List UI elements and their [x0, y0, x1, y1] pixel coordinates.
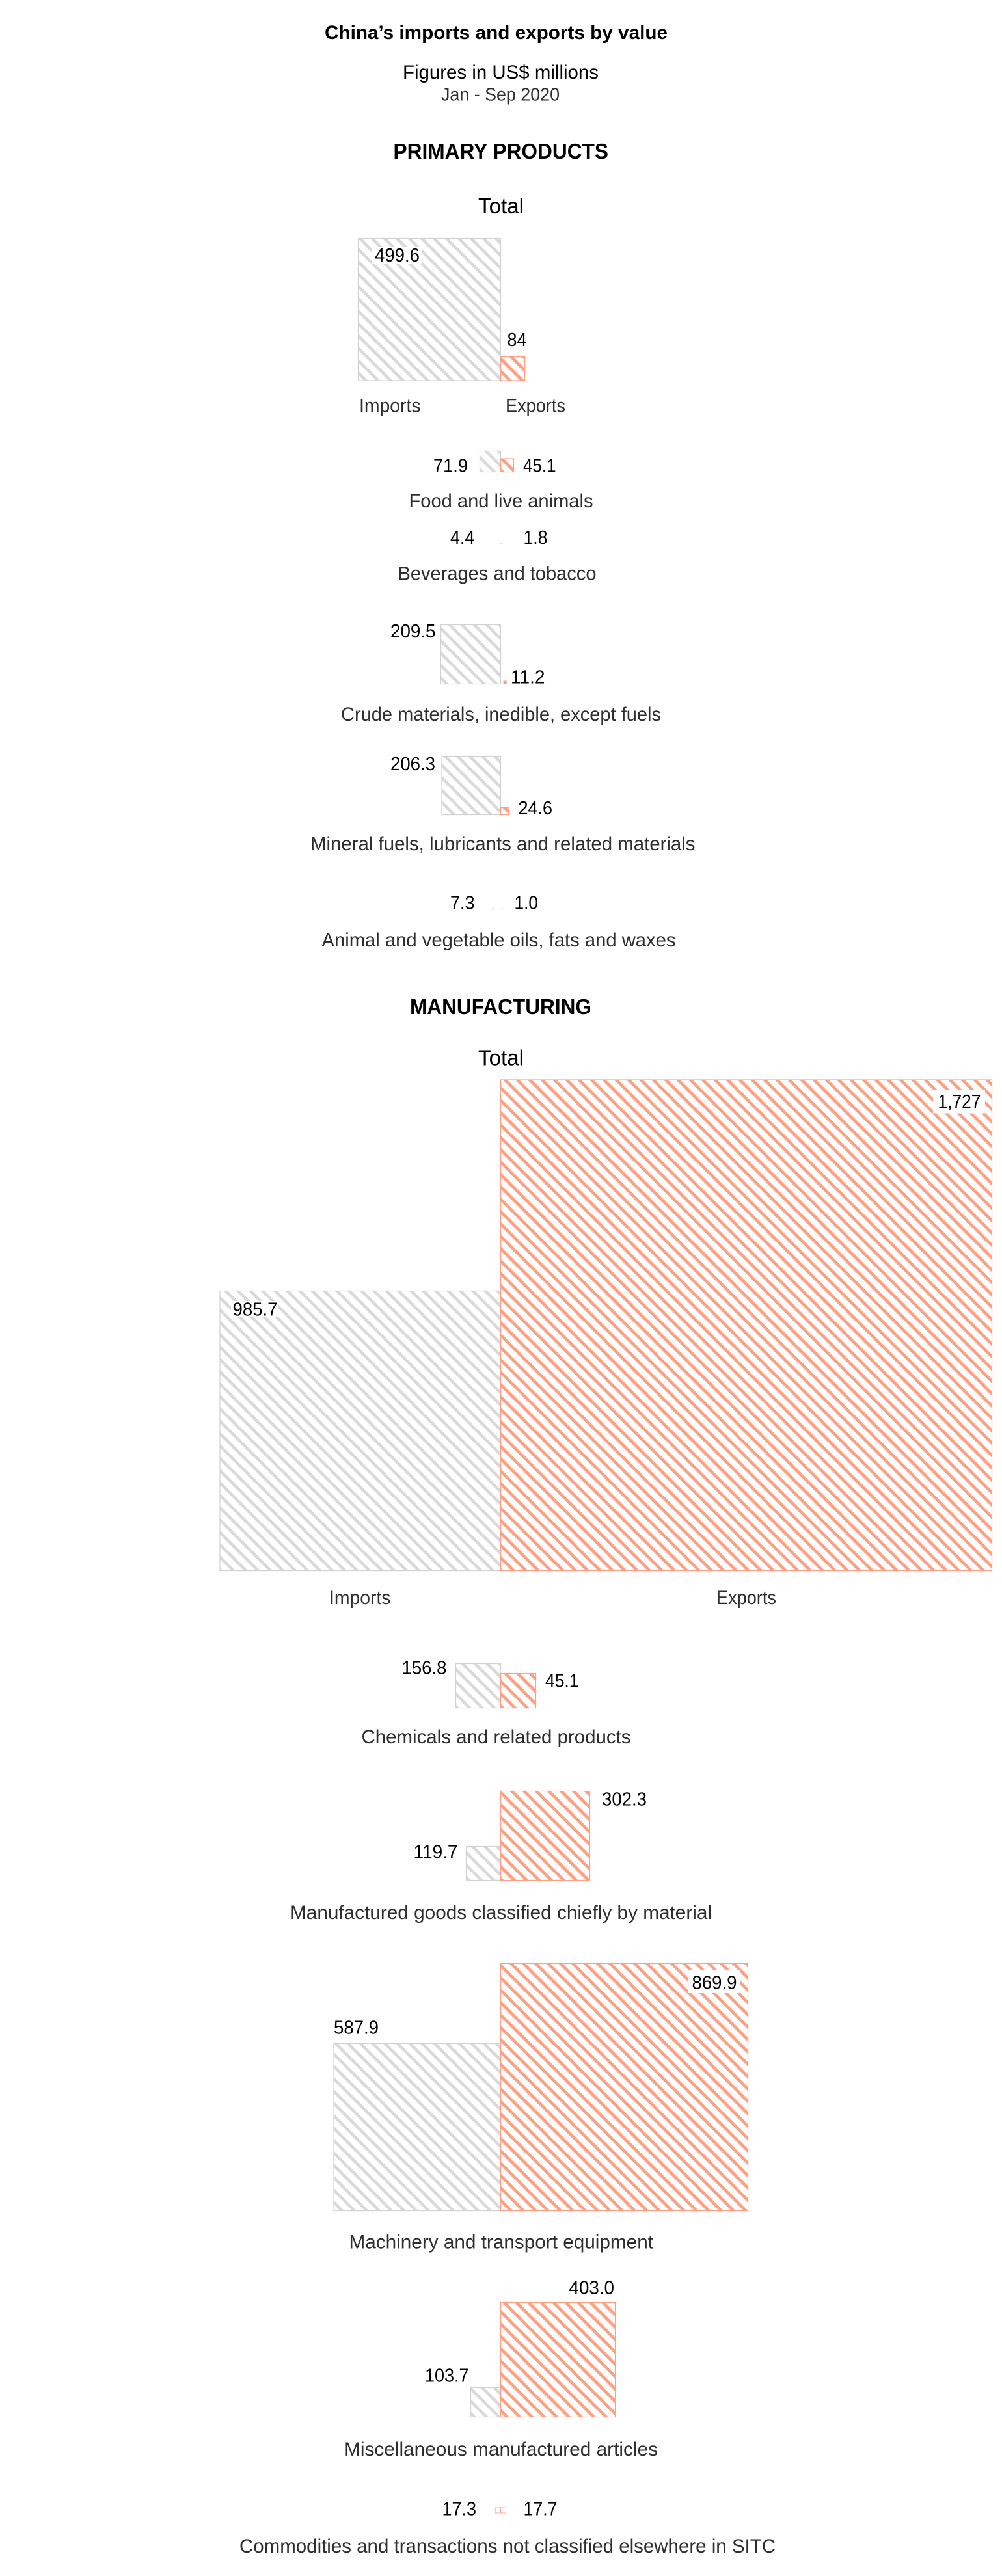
- value: exports: 11.2: [511, 667, 545, 688]
- heading: primary total: Total: [478, 194, 524, 218]
- value: imports: 71.9: [433, 455, 468, 476]
- category label: Manufactured goods classified chiefly by material: [290, 1902, 712, 1924]
- value: exports: 45.1: [523, 455, 556, 476]
- category label: Chemicals and related products: [362, 1726, 631, 1748]
- value: imports: 7.3: [450, 892, 475, 913]
- chart: animal and vegetable oils: [321, 892, 675, 951]
- chart: commodities not classified: [239, 2499, 776, 2557]
- heading: manufacturing total: Total: [478, 1046, 524, 1069]
- value box: exports: [688, 1970, 740, 1993]
- bar: imports 156.8: [455, 1664, 501, 1708]
- bar: imports 17.3: [496, 2508, 501, 2513]
- bar: exports 302.3: [501, 1791, 589, 1880]
- value: imports: 119.7: [414, 1842, 458, 1863]
- value: exports: 403.0: [569, 2278, 614, 2299]
- value: exports: 45.1: [545, 1670, 579, 1691]
- category label: Animal and vegetable oils, fats and waxes: [321, 930, 675, 951]
- bar: exports 24.6: [501, 808, 509, 814]
- label: exports: Exports: [506, 396, 565, 416]
- bar: imports 103.7: [471, 2387, 501, 2417]
- category label: Machinery and transport equipment: [349, 2231, 654, 2253]
- chart: miscellaneous articles: [344, 2278, 658, 2460]
- label: imports: Imports: [359, 396, 420, 416]
- value: imports: 587.9: [334, 2018, 379, 2039]
- value: exports: 24.6: [518, 798, 552, 819]
- value: exports: 302.3: [602, 1789, 647, 1810]
- chart: beverages and tobacco: [398, 528, 596, 584]
- bar: exports 403.0: [501, 2303, 616, 2417]
- chart: machinery and transport: [334, 1963, 748, 2253]
- bar: imports 4.4: [500, 543, 501, 544]
- value: imports: 4.4: [450, 528, 475, 548]
- value: exports: 1,727: [938, 1092, 981, 1112]
- subtitle: period: Jan - Sep 2020: [441, 85, 560, 104]
- bar: imports 206.3: [442, 756, 501, 814]
- chart: food and live animals: [409, 451, 593, 512]
- value: imports: 209.5: [390, 621, 436, 642]
- bar: imports 587.9: [334, 2044, 501, 2210]
- bar: exports 869.9: [501, 1963, 748, 2210]
- value: imports: 17.3: [442, 2499, 476, 2520]
- chart: mineral fuels: [310, 754, 695, 855]
- chart: manufacturing total: [220, 1080, 992, 1609]
- bar: imports 985.7: [220, 1291, 501, 1570]
- bar: exports 11.2: [504, 680, 507, 684]
- chart: primary products total: [358, 238, 565, 416]
- label: exports: Exports: [716, 1587, 776, 1609]
- chart: crude materials: [341, 621, 661, 725]
- heading: primary products: PRIMARY PRODUCTS: [393, 139, 608, 163]
- value: imports: 103.7: [425, 2365, 468, 2386]
- value: exports: 84: [508, 330, 527, 351]
- value box: imports: [231, 1301, 278, 1317]
- category label: Commodities and transactions not classified elsewhere in SITC: [239, 2536, 776, 2557]
- category label: Beverages and tobacco: [398, 563, 596, 584]
- bar: exports 17.7: [501, 2508, 506, 2513]
- bar: exports 1,727: [501, 1080, 992, 1570]
- category label: Food and live animals: [409, 490, 593, 512]
- bar: exports 1.0: [501, 908, 503, 909]
- value: exports: 17.7: [523, 2499, 557, 2520]
- bar: exports 84: [501, 356, 524, 381]
- value: imports: 156.8: [402, 1657, 446, 1678]
- value: imports: 985.7: [233, 1300, 277, 1321]
- subtitle: units: Figures in US$ millions: [403, 62, 599, 83]
- category label: Miscellaneous manufactured articles: [344, 2439, 658, 2460]
- category label: Mineral fuels, lubricants and related materials: [310, 833, 695, 855]
- value box: exports: [933, 1090, 985, 1114]
- title: China’s imports and exports by value: [325, 22, 668, 44]
- chart: chemicals: [362, 1657, 631, 1748]
- bar: imports 7.3: [492, 908, 494, 909]
- value: exports: 1.8: [523, 528, 548, 548]
- heading: manufacturing: MANUFACTURING: [410, 995, 591, 1019]
- value box: imports: [372, 247, 422, 264]
- chart: manufactured goods: [290, 1789, 712, 1924]
- value: exports: 1.0: [514, 892, 538, 913]
- value: exports: 869.9: [692, 1972, 737, 1993]
- bar: imports 71.9: [480, 451, 501, 472]
- label: imports: Imports: [329, 1587, 390, 1609]
- bar: imports 119.7: [466, 1846, 501, 1880]
- category label: Crude materials, inedible, except fuels: [341, 704, 661, 725]
- bar: exports 45.1: [501, 1673, 536, 1708]
- bar: imports 209.5: [441, 624, 501, 684]
- bar: exports 1.8: [501, 543, 502, 544]
- bar: exports 45.1: [501, 459, 514, 472]
- value: imports: 206.3: [390, 754, 435, 775]
- bar: imports 499.6: [358, 238, 501, 381]
- value: imports: 499.6: [375, 245, 420, 266]
